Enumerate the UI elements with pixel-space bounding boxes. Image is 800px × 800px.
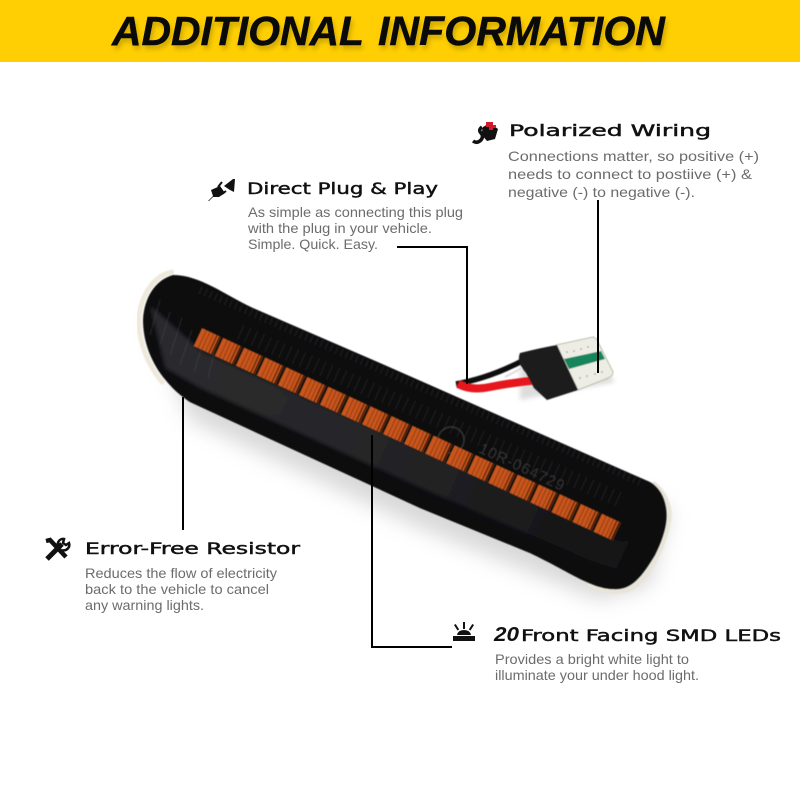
lower grey lens band [150,305,650,575]
description: Connections matter, so positive (+) [508,148,759,164]
heat-shrink sleeve [519,345,578,400]
title: ADDITIONAL [113,12,366,58]
icon: beacon light [453,622,475,641]
description: back to the vehicle to cancel [85,581,269,597]
callout: error-free resistor [46,539,301,613]
header banner [0,0,800,62]
title: INFORMATION [380,12,668,58]
description [495,651,699,683]
body shadow [150,310,670,600]
connector board [556,337,613,390]
housing [143,275,667,595]
description: Simple. Quick. Easy. [248,236,378,252]
amber LED row [194,328,621,541]
lens marking text: 10R-064729 [476,440,567,495]
leader line: LEDs [372,435,452,647]
callout: polarized wiring [473,121,759,200]
description [85,565,277,613]
heading [493,624,781,646]
description [247,204,463,252]
heading: 20 [493,624,519,646]
callout: 20 front facing SMD LEDs [453,622,781,683]
description: any warning lights. [85,597,204,613]
red wire [458,380,540,388]
top textured strip [200,290,640,482]
description: needs to connect to postiive (+) & [508,166,753,182]
lower black edge [185,392,620,595]
description: negative (-) to negative (-). [508,184,695,200]
description [508,148,759,200]
description: Provides a bright white light to [495,651,689,667]
title: INFORMATION [378,8,666,54]
white wire [505,368,522,377]
wire connector [456,337,613,400]
leader line: polarized wiring [597,200,599,373]
description: As simple as connecting this plug [248,204,463,220]
description: with the plug in your vehicle. [247,220,432,236]
heading: Front Facing SMD LEDs [521,626,781,645]
heading: Polarized Wiring [509,121,711,140]
product: LED side marker light [139,272,670,600]
icon: crossed tools [46,539,69,559]
title [111,8,668,58]
description: Reduces the flow of electricity [85,565,277,581]
icon: wiring plug [473,122,498,142]
title: ADDITIONAL [111,8,364,54]
black wire [456,360,524,384]
leader line: resistor [182,397,184,530]
description: illuminate your under hood light. [495,667,699,683]
board pads [566,346,603,379]
leader line: plug and play [397,247,467,384]
icon: plug [208,179,235,201]
end cap rims [139,272,669,591]
heading: Error-Free Resistor [85,539,301,558]
lens logo mark [438,427,464,453]
heading: Direct Plug & Play [247,179,438,198]
faint lens ribs [150,300,215,378]
callout: direct plug and play [208,179,463,252]
green stripe [564,351,605,369]
